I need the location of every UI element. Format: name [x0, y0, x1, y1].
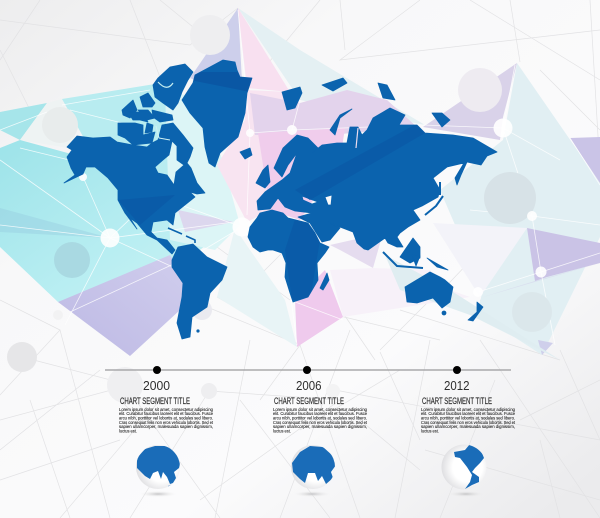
text block: Cras consequat felis non eros vehicula lobortis. Sed et — [119, 420, 214, 425]
year: 2012 — [444, 378, 470, 393]
segment 2000 — [119, 378, 214, 497]
polygon: pale white right — [433, 223, 527, 297]
polygon: pale central cyan — [165, 90, 240, 250]
continent: Eurasia — [257, 108, 497, 250]
node: white circles — [79, 118, 546, 297]
text block: elit. Curabitur faucibus laoreet elit et faucibus. Fusce — [421, 411, 515, 416]
text block — [421, 407, 516, 433]
text block: sapien ullamcorper, malesuada sapien dignissim, — [421, 424, 515, 429]
heading: CHART SEGMENT TITLE — [120, 396, 190, 407]
polygon: purple bottom sliver — [538, 340, 553, 355]
text block: arcu nibh, porttitor vel lobortis at, sodales sed libero. — [119, 416, 213, 420]
Ob gulf — [356, 128, 358, 148]
text block: sapien ullamcorper, malesuada sapien dignissim, — [119, 424, 213, 429]
polygon: purple wedge centre — [178, 210, 234, 232]
polygon: pink top — [238, 8, 290, 92]
colored polygons — [0, 8, 600, 360]
text block: arcu nibh, porttitor vel lobortis at, sodales sed libero. — [273, 416, 367, 420]
text block: luctus est. — [421, 428, 439, 433]
continent: South America — [172, 244, 227, 339]
polygon: purple top right — [423, 63, 517, 140]
islands: Caribbean — [168, 228, 195, 243]
polygon: pink europe — [258, 128, 345, 220]
text block: elit. Curabitur faucibus laoreet elit et faucibus. Fusce — [119, 411, 213, 416]
node: grey circles — [7, 15, 552, 403]
polygon: lilac europe band — [250, 90, 417, 135]
polygon: lavender top — [190, 8, 243, 100]
heading: CHART SEGMENT TITLE — [274, 396, 344, 407]
polygon: band under Australia — [385, 255, 560, 360]
timeline line — [105, 369, 511, 371]
text block: luctus est. — [273, 428, 291, 433]
text block: Lorem ipsum dolor sit amet, consectetur adipiscing — [421, 407, 515, 412]
polygon: top left cyan strip — [0, 103, 47, 140]
islands: small south Atlantic — [197, 330, 199, 332]
world map — [64, 60, 497, 339]
timeline dots — [153, 366, 461, 374]
polygon: purple lower left — [58, 255, 184, 356]
segment 2012 — [421, 378, 516, 497]
islands: Canadian Arctic — [118, 64, 193, 145]
heading: CHART SEGMENT TITLE — [422, 396, 492, 407]
text block: Lorem ipsum dolor sit amet, consectetur adipiscing — [273, 407, 367, 412]
polygon: pale grey wedge — [20, 99, 80, 150]
icon: globe Eurasia — [291, 445, 336, 497]
polygon: pale lilac south asia — [330, 233, 383, 268]
text block: Lorem ipsum dolor sit amet, consectetur adipiscing — [119, 407, 213, 412]
text block: luctus est. — [119, 428, 137, 433]
polygon: purple thin ray — [483, 263, 600, 297]
text block — [273, 407, 368, 433]
year: 2006 — [296, 378, 322, 393]
polygon: purple far right — [570, 137, 600, 183]
icon: globe Asia — [136, 445, 181, 497]
continent: North America — [64, 123, 205, 254]
text block: sapien ullamcorper, malesuada sapien dignissim, — [273, 424, 367, 429]
polygon: pink centre — [217, 90, 300, 222]
text block: Cras consequat felis non eros vehicula lobortis. Sed et — [273, 420, 368, 425]
polygon: pale lower centre — [217, 228, 297, 347]
islands: others — [240, 78, 483, 321]
text block: elit. Curabitur faucibus laoreet elit et faucibus. Fusce — [273, 411, 367, 416]
polygon: pink lower africa — [295, 270, 343, 347]
polygon: upper cyan — [62, 84, 200, 200]
segment 2006 — [273, 378, 368, 497]
polygon: very pale indian ocean — [330, 268, 470, 317]
continent: Greenland — [182, 60, 252, 167]
continent: Africa — [248, 210, 329, 302]
network lines over polygons — [0, 10, 600, 345]
polygon: pale cyan top — [238, 8, 425, 125]
polygon: pale cyan right — [440, 63, 600, 355]
polygon: main cyan — [0, 140, 235, 302]
circle nodes — [7, 15, 552, 403]
year: 2000 — [143, 378, 170, 393]
polygon: shaded band — [0, 208, 110, 238]
text block: Cras consequat felis non eros vehicula lobortis. Sed et — [421, 420, 516, 425]
icon: globe Americas — [442, 444, 486, 497]
continent: Australia — [405, 272, 453, 308]
text block: arcu nibh, porttitor vel lobortis at, sodales sed libero. — [421, 416, 515, 420]
timeline — [105, 366, 511, 374]
polygon: purple mid right — [527, 228, 600, 281]
text block — [119, 407, 214, 433]
map shading — [118, 72, 425, 300]
